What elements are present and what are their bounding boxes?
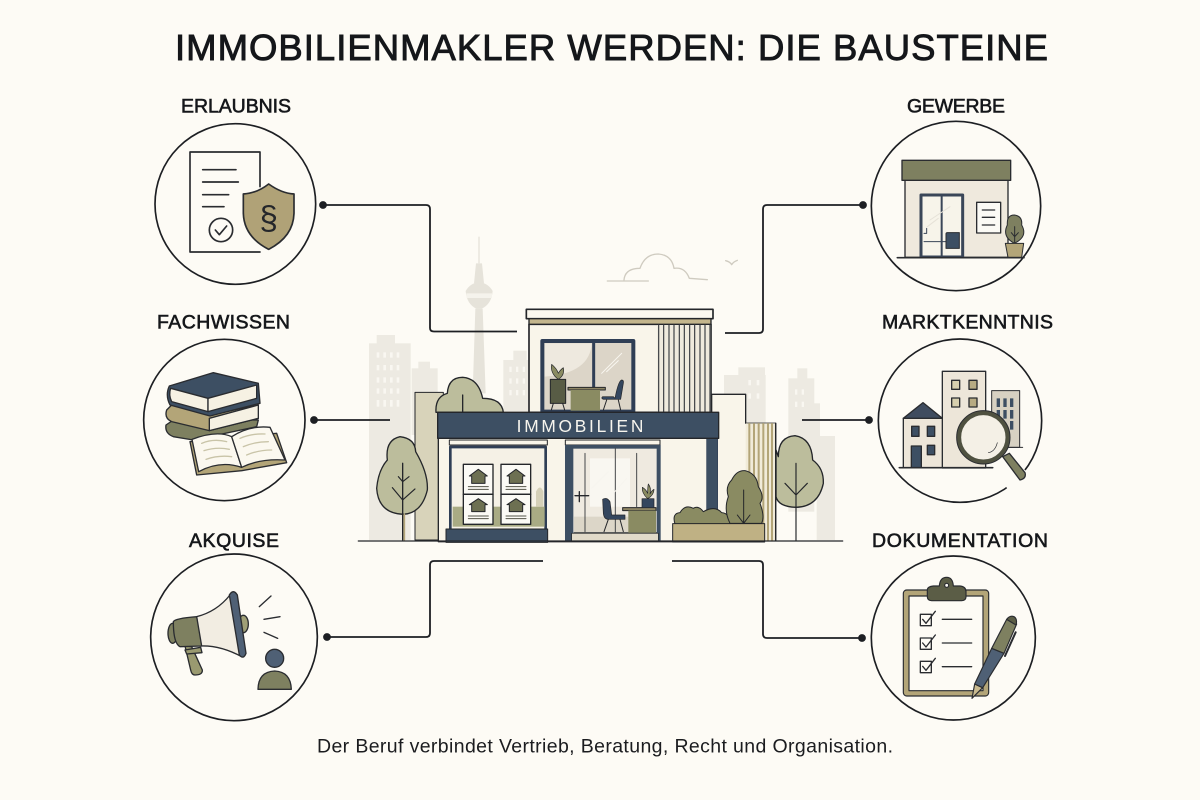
plant	[551, 364, 564, 379]
label: Erlaubnis: ERLAUBNIS	[181, 96, 291, 118]
panel: Fachwissen icon	[144, 339, 305, 501]
middle book	[166, 405, 258, 431]
pen	[972, 616, 1017, 698]
open book	[190, 427, 287, 475]
door with office interior	[565, 440, 661, 542]
connector: Erlaubnis	[320, 202, 517, 332]
connector: Fachwissen	[311, 417, 390, 423]
desk and chair	[568, 387, 605, 390]
door	[921, 195, 963, 257]
potted plant	[1005, 215, 1024, 257]
caption: Der Beruf verbindet Vertrieb, Beratung, Recht und Organisation.	[317, 736, 893, 758]
column	[707, 438, 718, 511]
sign fascia with lettering	[438, 412, 719, 438]
house	[903, 403, 942, 468]
ground wall lower	[438, 438, 708, 542]
tall building	[942, 371, 986, 468]
roof	[902, 160, 1011, 180]
sound lines	[259, 596, 280, 638]
megaphone	[168, 592, 248, 675]
connector: Dokumentation	[672, 561, 865, 641]
panel: Akquise icon	[151, 554, 317, 721]
notice	[977, 202, 1001, 233]
connector: Akquise	[324, 561, 543, 640]
panel: Marktkenntnis icon	[878, 339, 1042, 502]
side walls	[415, 392, 443, 540]
lower desk and chair	[623, 508, 656, 511]
planter with shrubs	[673, 471, 765, 542]
clipboard	[903, 577, 989, 696]
title: IMMOBILIENMAKLER WERDEN: DIE BAUSTEINE	[175, 27, 1048, 68]
label: Gewerbe: GEWERBE	[907, 96, 1005, 118]
sign fascia with lettering: IMMOBILIEN	[517, 416, 643, 436]
panel: Gewerbe icon	[871, 121, 1041, 291]
tv tower	[466, 237, 493, 393]
tree left	[377, 437, 427, 540]
bush behind fascia	[436, 377, 503, 412]
upper window	[542, 341, 633, 412]
upper floor	[526, 309, 713, 412]
ground line	[897, 255, 1024, 260]
panel: Dokumentation icon	[871, 556, 1035, 720]
panel: Erlaubnis icon	[155, 124, 316, 284]
far building	[990, 391, 1023, 447]
lower window with listings	[446, 440, 548, 542]
label: Fachwissen: FACHWISSEN	[157, 312, 290, 334]
connector: Gewerbe	[725, 202, 866, 333]
tan louvers right	[746, 423, 776, 541]
central illustration: real estate office	[358, 237, 843, 542]
label: Dokumentation: DOKUMENTATION	[872, 530, 1048, 552]
document	[190, 152, 260, 252]
shop wall	[905, 180, 1008, 257]
ground line	[358, 539, 843, 543]
shield	[243, 184, 294, 249]
connector: Marktkenntnis	[802, 417, 872, 423]
background skyline	[369, 335, 835, 540]
person	[258, 649, 291, 689]
tree right	[776, 436, 823, 541]
cloud and bird	[607, 254, 737, 281]
checklist	[920, 611, 972, 673]
magnifier	[957, 411, 1025, 480]
bottom book	[166, 420, 258, 440]
listings grid	[463, 464, 531, 524]
top book	[167, 373, 260, 416]
shield: §	[259, 200, 278, 237]
label: Marktkenntnis: MARKTKENNTNIS	[882, 312, 1053, 334]
label: Akquise: AKQUISE	[189, 530, 279, 552]
